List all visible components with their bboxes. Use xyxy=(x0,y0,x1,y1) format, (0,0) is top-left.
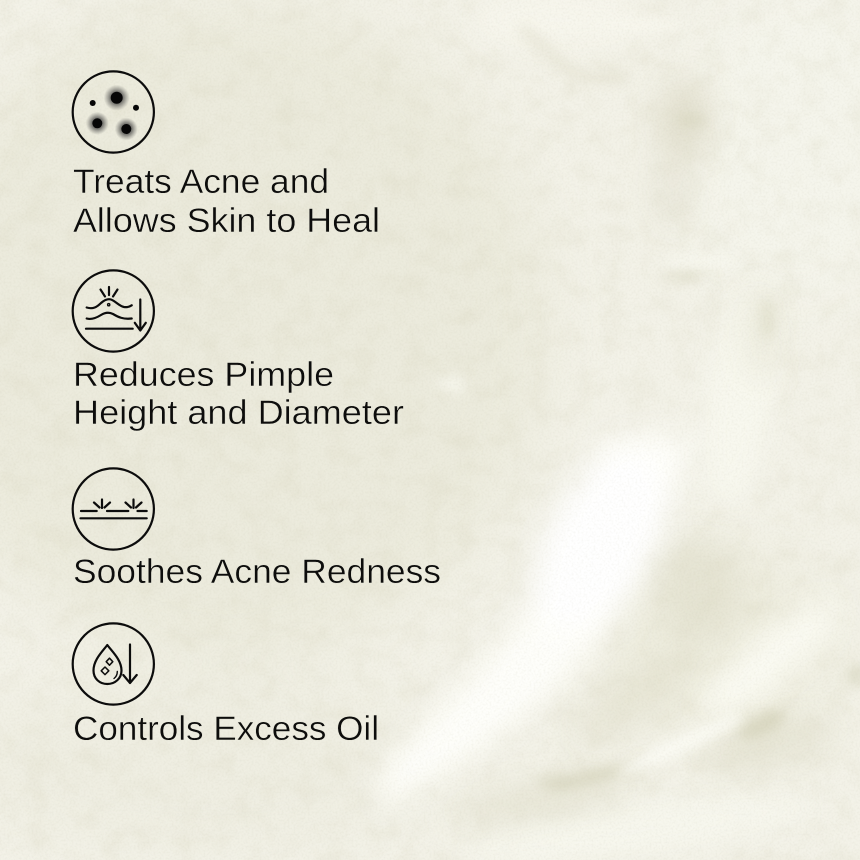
text: reduces pimple: Height and Diameter xyxy=(73,394,404,432)
benefit 4: controls oil xyxy=(73,623,379,748)
icon: pimple height with down arrow xyxy=(73,270,154,352)
icon: acne spots xyxy=(73,71,154,153)
text: soothes redness: Soothes Acne Redness xyxy=(73,553,441,591)
text: treats acne: Allows Skin to Heal xyxy=(73,202,380,240)
text: treats acne: Treats Acne and xyxy=(73,163,329,201)
text: reduces pimple: Reduces Pimple xyxy=(73,356,334,394)
benefit 2: reduces pimple xyxy=(73,270,404,432)
icon: calmed skin surface xyxy=(73,468,154,550)
benefit 3: soothes redness xyxy=(73,468,441,591)
icon: oil drop with down arrow xyxy=(73,623,154,705)
text: controls oil: Controls Excess Oil xyxy=(73,710,379,748)
benefit 1: treats acne xyxy=(73,71,380,240)
